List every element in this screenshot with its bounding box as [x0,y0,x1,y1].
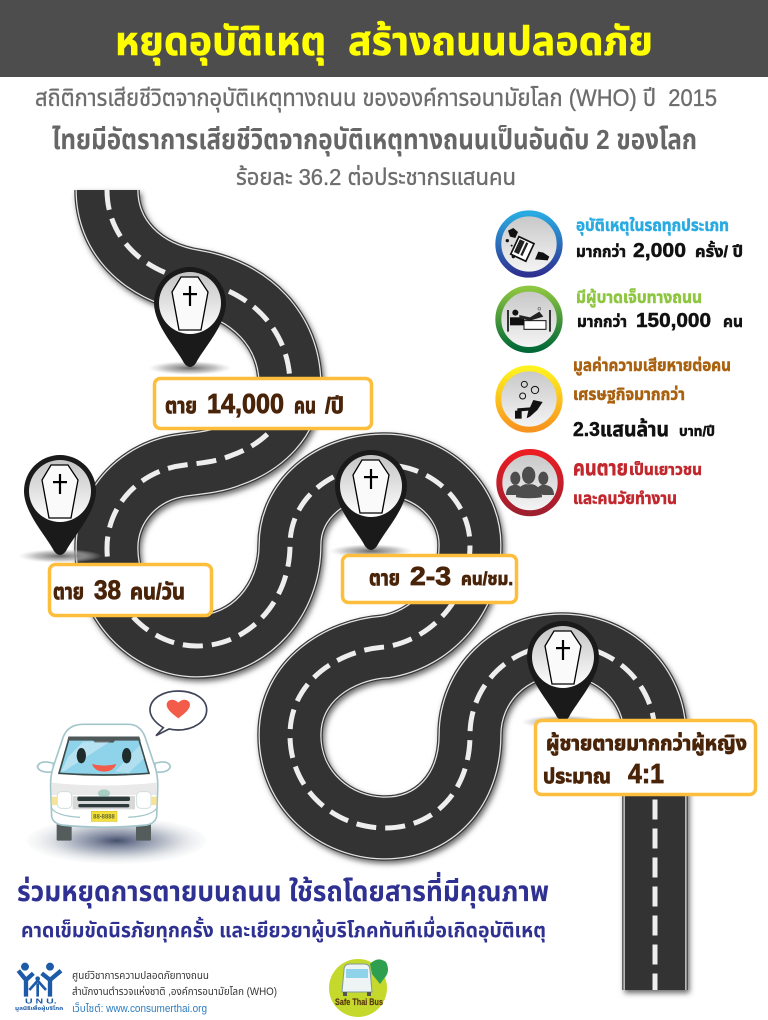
slogan: ร่วมหยุดการตายบนถนน ใช้รถโดยสารที่มีคุณภาพ [17,871,549,908]
stat: accidents: 2,000 [633,240,686,262]
callout: men die more than women 4:1 [536,720,756,794]
callout: men die more than women 4:1: ประมาณ [543,766,611,788]
stat: injured: มีผู้บาดเจ็บทางถนน [576,287,702,308]
callout: 14,000 deaths per year: คน [294,393,316,418]
stat: victims are youth and working age: คนตาย [573,457,628,480]
footer organisation text: เว็บไซต์: www.consumerthai.org [72,1003,207,1015]
winding road [107,190,657,993]
map pin: coffin 4 [521,621,605,729]
logo: Safe Thai Bus [329,959,388,1017]
stat: accidents: มากกว่า [576,243,626,261]
stat: accidents [576,216,743,262]
subtitle: WHO statistics: สถิติการเสียชีวิตจากอุบัติเหตุทางถนน ขององค์การอนามัยโลก (WHO) ปี 2015 [35,85,717,113]
logo: UNU foundation: มูลนิธิเพื่อผู้บริโภค [15,1004,63,1012]
callout: men die more than women 4:1: 4:1 [628,758,664,789]
illustration: smiling van [27,724,207,864]
icon: money loss [498,368,560,430]
callout: 38 deaths per day [50,564,212,616]
stat: injured [576,287,743,332]
callout: 14,000 deaths per year: /ปี [325,393,344,418]
subtitle: rate: ร้อยละ 36.2 ต่อประชากรแสนคน [236,164,516,190]
footer organisation text [72,970,277,1015]
callout: 14,000 deaths per year: ตาย [165,393,197,418]
stat: victims are youth and working age: เป็นเยาวชน [629,461,702,479]
callout: 14,000 deaths per year [154,378,372,428]
logo: Safe Thai Bus: Safe Thai Bus [335,997,383,1007]
stat: economic loss: มูลค่าความเสียหายต่อคน [573,355,731,376]
stat: victims are youth and working age [573,457,702,508]
map pin: coffin 2 [18,455,102,563]
stat: injured: 150,000 [636,310,711,332]
callout: 2-3 deaths per hour: คน/ชม. [461,569,513,589]
map pin: coffin 3 [329,450,413,558]
logo: UNU foundation: U N U. [25,996,57,1005]
stat: accidents: อุบัติเหตุในรถทุกประเภท [576,216,729,236]
footer organisation text: สำนักงานตำรวจแห่งชาติ ,องค์การอนามัยโลก (WHO) [72,985,277,998]
logo: UNU foundation [15,963,63,1012]
callout: 2-3 deaths per hour [342,556,516,602]
title: หยุดอุบัติเหตุ สร้างถนนปลอดภัย [115,19,653,66]
stat: accidents: ครั้ง/ ปี [695,241,743,261]
callout: 2-3 deaths per hour: ตาย [369,567,400,590]
stat: economic loss: บาท/ปี [679,423,715,439]
illustration: smiling van: 88-8888 [93,814,115,821]
stat: injured: คน [723,314,743,331]
callout: 38 deaths per day: ตาย [53,579,84,604]
callout: 2-3 deaths per hour: 2-3 [410,561,451,591]
stat: economic loss [573,355,731,441]
callout: 38 deaths per day: คน/วัน [130,579,185,604]
sub slogan: คาดเข็มขัดนิรภัยทุกครั้ง และเยียวยาผู้บริโภคทันทีเมื่อเกิดอุบัติเหตุ [21,916,546,942]
footer organisation text: ศูนย์วิชาการความปลอดภัยทางถนน [72,970,209,982]
speech bubble with heart [150,691,207,736]
stat: injured: มากกว่า [577,313,627,331]
stat: economic loss: เศรษฐกิจมากกว่า [573,384,685,404]
icon: people group [499,452,561,513]
icon: overturned vehicle [498,213,560,275]
header banner [0,0,768,77]
stat: victims are youth and working age: และคนวัยทำงาน [573,489,677,508]
callout: 38 deaths per day: 38 [94,575,121,605]
callout: 14,000 deaths per year: 14,000 [207,388,284,419]
map pin: coffin 1 [148,267,232,375]
callout: men die more than women 4:1: ผู้ชายตายมากกว่าผู้หญิง [546,733,747,755]
stat: economic loss: 2.3แสนล้าน [573,419,669,441]
icon: hospital bed [498,289,560,350]
